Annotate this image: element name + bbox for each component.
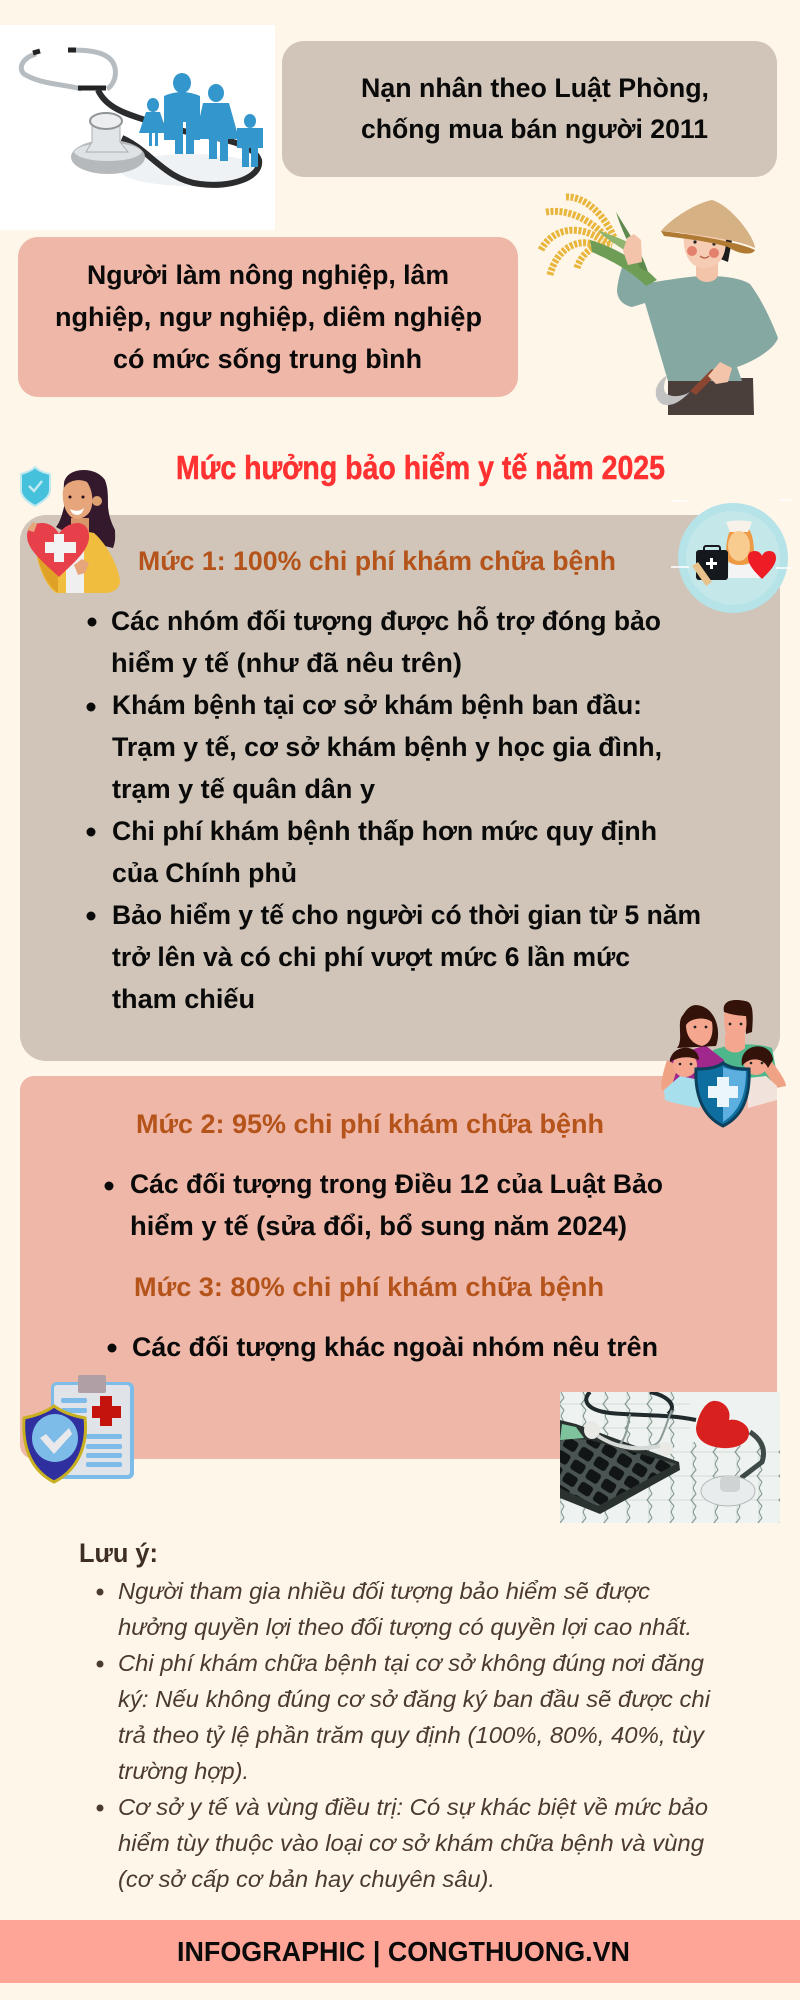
notes list: Cơ sở y tế và vùng điều trị: Có sự khác biệt về mức bảo xyxy=(118,1794,708,1820)
list: level 3 items: Các đối tượng khác ngoài nhóm nêu trên xyxy=(132,1332,658,1362)
image: calculator, stethoscope and heart xyxy=(560,1392,780,1523)
notes list: hiểm tùy thuộc vào loại cơ sở khám chữa bệnh và vùng xyxy=(118,1830,704,1856)
list: level 1 items: trở lên và có chi phí vượt mức 6 lần mức xyxy=(112,942,630,972)
box: victim group heading: chống mua bán người 2011 xyxy=(361,114,708,144)
box: farmers group heading xyxy=(18,237,518,397)
list: level 1 items: Khám bệnh tại cơ sở khám bệnh ban đầu: xyxy=(112,690,642,720)
panel: levels 2 and 3 xyxy=(20,1076,777,1459)
notes list xyxy=(96,1578,711,1892)
notes heading: Lưu ý: xyxy=(79,1538,158,1568)
list: level 1 items: Các nhóm đối tượng được hỗ trợ đóng bảo xyxy=(111,605,661,636)
illustration: clipboard with shield xyxy=(24,1375,134,1482)
box: victim group heading xyxy=(282,41,777,177)
notes list: (cơ sở cấp cơ bản hay chuyên sâu). xyxy=(118,1866,495,1892)
list: level 1 items: Chi phí khám bệnh thấp hơn mức quy định xyxy=(112,816,657,846)
heading: level 2: Mức 2: 95% chi phí khám chữa bệnh xyxy=(136,1109,604,1139)
list: level 2 items: hiểm y tế (sửa đổi, bổ sung năm 2024) xyxy=(130,1211,627,1241)
list: level 1 items: Bảo hiểm y tế cho người có thời gian từ 5 năm xyxy=(112,900,701,930)
box: farmers group heading: nghiệp, ngư nghiệp, diêm nghiệp xyxy=(55,302,482,332)
notes list: trả theo tỷ lệ phần trăm quy định (100%, 80%, 40%, tùy xyxy=(118,1722,705,1748)
notes list: hưởng quyền lợi theo đối tượng có quyền lợi cao nhất. xyxy=(118,1614,692,1640)
list: level 1 items: tham chiếu xyxy=(112,984,255,1014)
illustration: family with shield xyxy=(661,1000,786,1126)
list: level 1 items: Trạm y tế, cơ sở khám bệnh y học gia đình, xyxy=(112,732,662,762)
notes list: trường hợp). xyxy=(118,1758,249,1784)
list: level 2 items xyxy=(104,1169,663,1241)
illustration: nurse badge xyxy=(671,500,792,613)
box: farmers group heading: Người làm nông nghiệp, lâm xyxy=(87,260,449,290)
notes list: Chi phí khám chữa bệnh tại cơ sở không đúng nơi đăng xyxy=(118,1650,704,1676)
list: level 1 items xyxy=(86,605,701,1014)
list: level 2 items: Các đối tượng trong Điều 12 của Luật Bảo xyxy=(130,1169,663,1199)
image: stethoscope and family xyxy=(0,25,275,230)
title: Mức hưởng bảo hiểm y tế năm 2025 xyxy=(176,449,665,486)
footer banner: INFOGRAPHIC | CONGTHUONG.VN xyxy=(177,1936,630,1967)
illustration: farmer with rice xyxy=(541,197,778,415)
box: farmers group heading: có mức sống trung bình xyxy=(113,344,422,374)
heading: level 1: Mức 1: 100% chi phí khám chữa bệnh xyxy=(138,546,616,576)
heading: level 3: Mức 3: 80% chi phí khám chữa bệnh xyxy=(134,1272,604,1302)
panel: level 1 xyxy=(20,515,780,1061)
box: victim group heading: Nạn nhân theo Luật Phòng, xyxy=(361,73,709,103)
footer banner xyxy=(0,1920,800,1983)
illustration: woman holding heart xyxy=(21,467,120,593)
notes list: Người tham gia nhiều đối tượng bảo hiểm sẽ được xyxy=(118,1578,650,1604)
list: level 1 items: của Chính phủ xyxy=(112,858,297,888)
notes list: ký: Nếu không đúng cơ sở đăng ký ban đầu sẽ được chi xyxy=(118,1686,711,1712)
list: level 1 items: hiểm y tế (như đã nêu trên) xyxy=(111,648,462,678)
list: level 1 items: trạm y tế quân dân y xyxy=(112,774,375,804)
